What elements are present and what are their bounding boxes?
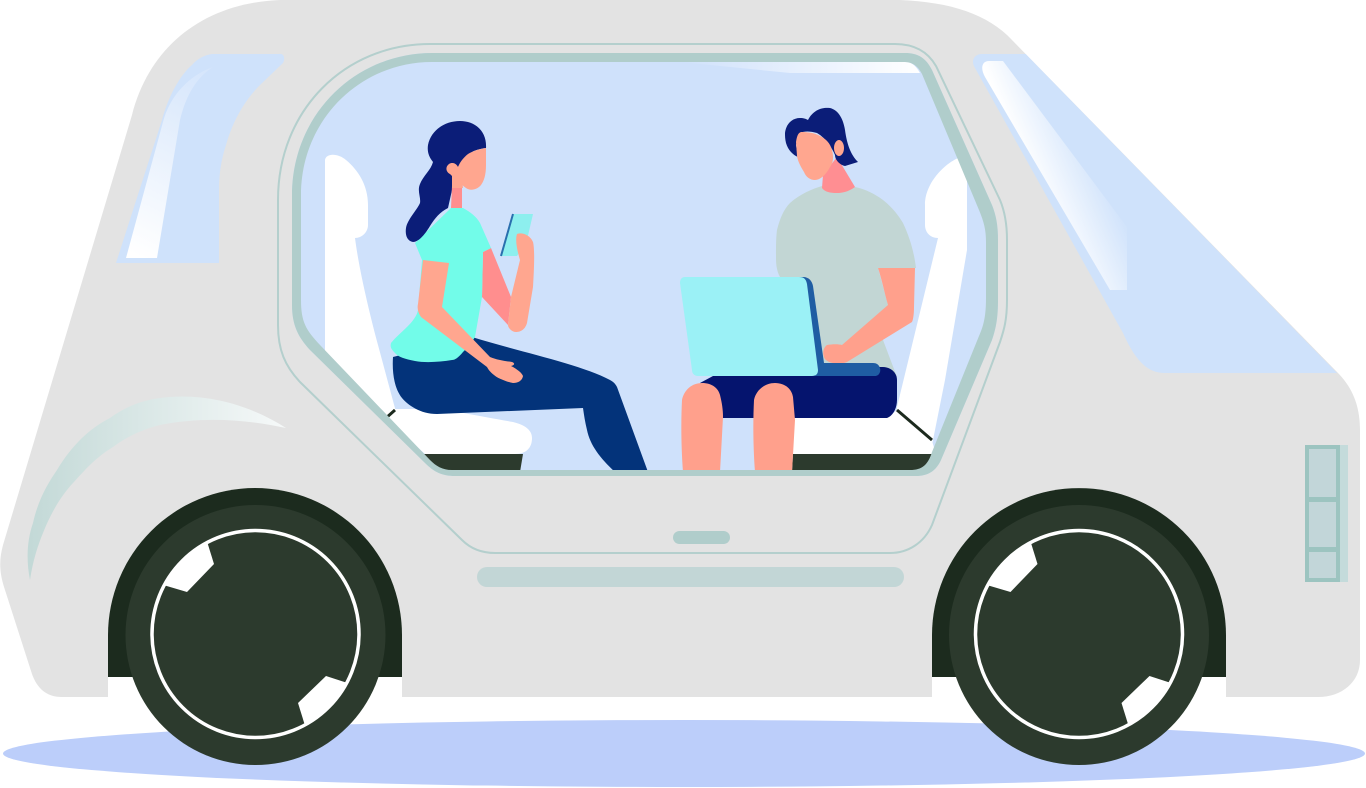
- front light: [1305, 445, 1348, 582]
- man: arm: [823, 268, 915, 364]
- man passenger: [680, 108, 916, 472]
- man: face: [796, 132, 833, 180]
- front arch: [932, 488, 1226, 677]
- door handle: [673, 531, 730, 544]
- woman: trousers: [393, 337, 648, 472]
- wheel arch highlight: [28, 397, 286, 580]
- woman: near arm: [418, 260, 523, 383]
- man: t-shirt: [735, 186, 916, 377]
- right seat: [792, 155, 967, 472]
- rear arch: [108, 488, 402, 677]
- rear side window: [116, 54, 284, 263]
- window glare: [680, 62, 920, 73]
- woman passenger: [391, 121, 648, 472]
- man: neck: [822, 157, 855, 193]
- woman: t-shirt: [391, 208, 491, 362]
- man: shorts: [700, 367, 897, 418]
- man: ear: [834, 140, 844, 156]
- side sill: [477, 567, 904, 587]
- window frame: [292, 53, 998, 476]
- man: legs: [681, 383, 795, 472]
- woman: hair: [406, 121, 486, 242]
- ground shadow: [3, 720, 1365, 787]
- door outline: [278, 44, 1007, 553]
- woman: far arm and phone: [482, 214, 534, 332]
- man: laptop: [680, 277, 880, 376]
- woman: neck: [451, 186, 462, 208]
- woman: ear and upper neck: [446, 163, 463, 188]
- windscreen: [973, 54, 1337, 373]
- cabin interior: [292, 53, 998, 476]
- woman: face: [457, 148, 486, 190]
- man: hair: [785, 108, 858, 166]
- left seat: [325, 155, 532, 472]
- rear wheel: [126, 505, 386, 765]
- front wheel: [949, 505, 1209, 765]
